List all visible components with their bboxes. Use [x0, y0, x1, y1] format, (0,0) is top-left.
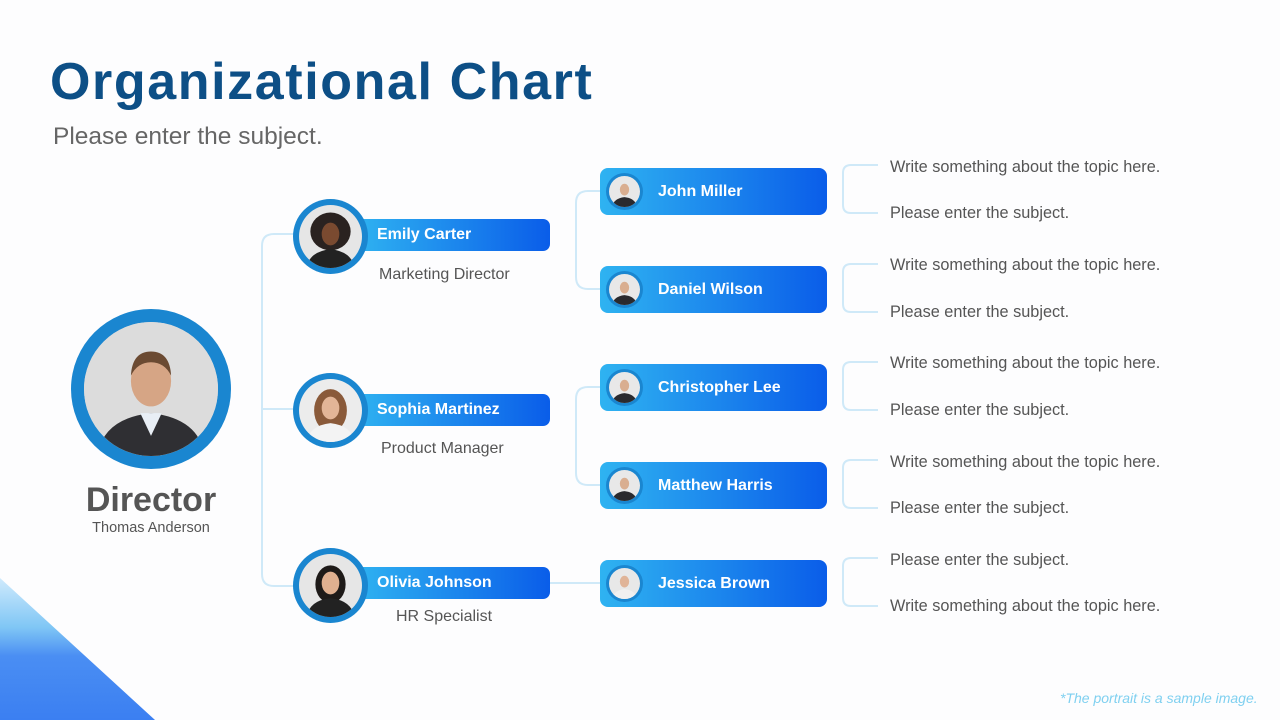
title: Organizational Chart [50, 53, 593, 111]
avatar [293, 373, 368, 448]
staff: Jessica Brown [600, 560, 827, 607]
notes: Jessica Brown [890, 551, 1160, 615]
role: Product Manager [381, 440, 504, 457]
manager: Olivia Johnson [293, 548, 550, 625]
avatar [606, 369, 643, 406]
staff: Jessica Brown: Jessica Brown [658, 574, 770, 592]
notes: Daniel Wilson: Write something about the topic here. [890, 256, 1160, 274]
director photo [71, 309, 231, 469]
manager: Sophia Martinez [293, 373, 550, 457]
role: HR Specialist [396, 608, 492, 625]
subtitle: Please enter the subject. [53, 123, 323, 150]
staff: John Miller: John Miller [658, 182, 742, 200]
bar [355, 219, 550, 251]
staff: John Miller [600, 168, 827, 215]
notes: Jessica Brown: Write something about the topic here. [890, 597, 1160, 615]
avatar [293, 548, 368, 623]
avatar [606, 271, 643, 308]
avatar [606, 565, 643, 602]
staff: Christopher Lee [600, 364, 827, 411]
avatar [293, 199, 368, 274]
decorative corner triangle [0, 578, 155, 720]
avatar [606, 467, 643, 504]
notes: Christopher Lee: Write something about the topic here. [890, 354, 1160, 372]
bar: Olivia Johnson [377, 574, 492, 591]
notes: Matthew Harris [890, 453, 1160, 517]
staff: Daniel Wilson: Daniel Wilson [658, 280, 763, 298]
bar: Sophia Martinez [377, 401, 500, 418]
director name: Thomas Anderson [92, 520, 210, 536]
footnote: *The portrait is a sample image. [1060, 690, 1258, 706]
notes: Matthew Harris: Please enter the subject. [890, 499, 1069, 517]
notes: Christopher Lee: Please enter the subject. [890, 401, 1069, 419]
staff: Matthew Harris: Matthew Harris [658, 476, 773, 494]
notes: Christopher Lee [890, 354, 1160, 419]
bar [355, 567, 550, 599]
staff: Matthew Harris [600, 462, 827, 509]
staff: Christopher Lee: Christopher Lee [658, 378, 781, 396]
notes: John Miller: Please enter the subject. [890, 204, 1069, 222]
avatar [606, 173, 643, 210]
bar: Emily Carter [377, 226, 471, 243]
director label: Director [86, 481, 216, 519]
notes: Daniel Wilson [890, 256, 1160, 321]
notes: John Miller [890, 158, 1160, 222]
notes: Daniel Wilson: Please enter the subject. [890, 303, 1069, 321]
bar [355, 394, 550, 426]
notes: Matthew Harris: Write something about the topic here. [890, 453, 1160, 471]
notes: John Miller: Write something about the topic here. [890, 158, 1160, 176]
staff: Daniel Wilson [600, 266, 827, 313]
notes: Jessica Brown: Please enter the subject. [890, 551, 1069, 569]
role: Marketing Director [379, 266, 510, 283]
manager: Emily Carter [293, 199, 550, 283]
